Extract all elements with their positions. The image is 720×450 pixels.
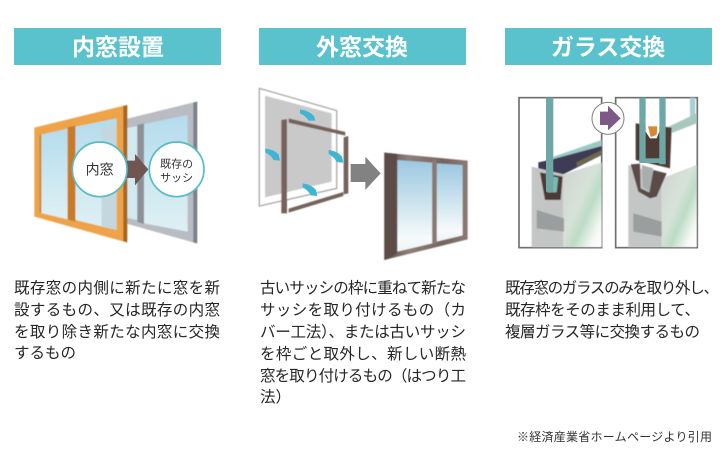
callout: 既存のサッシ: 既存の	[160, 156, 193, 170]
orange inner window	[34, 105, 127, 242]
heading bar: 外窓交換: 外窓交換	[316, 34, 408, 60]
illustration: inner window installed over existing sash	[34, 102, 204, 243]
text block: 内窓設置 description: を取り除き新たな内窓に交換	[14, 323, 220, 341]
text block: 外窓交換 description: サッシを取り付けるもの（カ	[260, 301, 466, 319]
heading bar: 外窓交換	[259, 28, 466, 65]
text block: 外窓交換 description: 窓を取り付けるもの（はつり工	[260, 367, 466, 385]
illustration: exterior window replacement	[259, 88, 468, 260]
text block: 外窓交換 description: を枠ごと取外し、新しい断熱	[260, 345, 466, 363]
text block: 内窓設置 description: するもの	[14, 344, 76, 362]
source note: ※経済産業省ホームページより引用	[517, 430, 712, 444]
arrow: inner window to sash	[125, 154, 148, 185]
callout: 内窓: 内窓	[86, 162, 114, 178]
text block: 外窓交換 description: バー工法）、または古いサッシ	[260, 323, 466, 341]
right panel: double-glazed unit	[616, 98, 697, 248]
curved blue arrows	[265, 109, 343, 196]
old frame and wall opening	[259, 88, 337, 206]
callout: 既存のサッシ	[149, 142, 204, 197]
heading bar: 内窓設置	[14, 28, 221, 65]
text block: 外窓交換 description	[260, 279, 466, 406]
text block: 外窓交換 description: 法）	[260, 388, 291, 406]
existing gray window	[102, 102, 197, 243]
left panel: existing single glass	[519, 98, 602, 248]
text block: ガラス交換 description: 既存窓のガラスのみを取り外し、	[505, 279, 719, 297]
callout: 内窓	[72, 142, 127, 197]
round arrow badge	[592, 102, 624, 134]
text block: ガラス交換 description: 複層ガラス等に交換するもの	[505, 323, 700, 341]
text block: 外窓交換 description: 古いサッシの枠に重ねて新たな	[260, 279, 466, 297]
heading bar: ガラス交換	[505, 28, 712, 65]
text block: 内窓設置 description: 既存窓の内側に新たに窓を新	[14, 279, 220, 297]
text block: ガラス交換 description	[505, 279, 719, 341]
illustration: glass replacement cross-section	[519, 98, 697, 248]
text block: ガラス交換 description: 既存枠をそのまま利用して、	[505, 301, 700, 319]
heading bar: 内窓設置: 内窓設置	[72, 34, 164, 60]
new sash frame pieces	[281, 118, 348, 213]
heading bar: ガラス交換: ガラス交換	[551, 34, 665, 60]
new brown sliding window	[384, 153, 468, 260]
gray arrow	[351, 157, 381, 190]
text block: 内窓設置 description	[14, 279, 220, 362]
callout: 既存のサッシ: サッシ	[160, 171, 193, 184]
text block: 内窓設置 description: 設するもの、又は既存の内窓	[14, 301, 220, 319]
